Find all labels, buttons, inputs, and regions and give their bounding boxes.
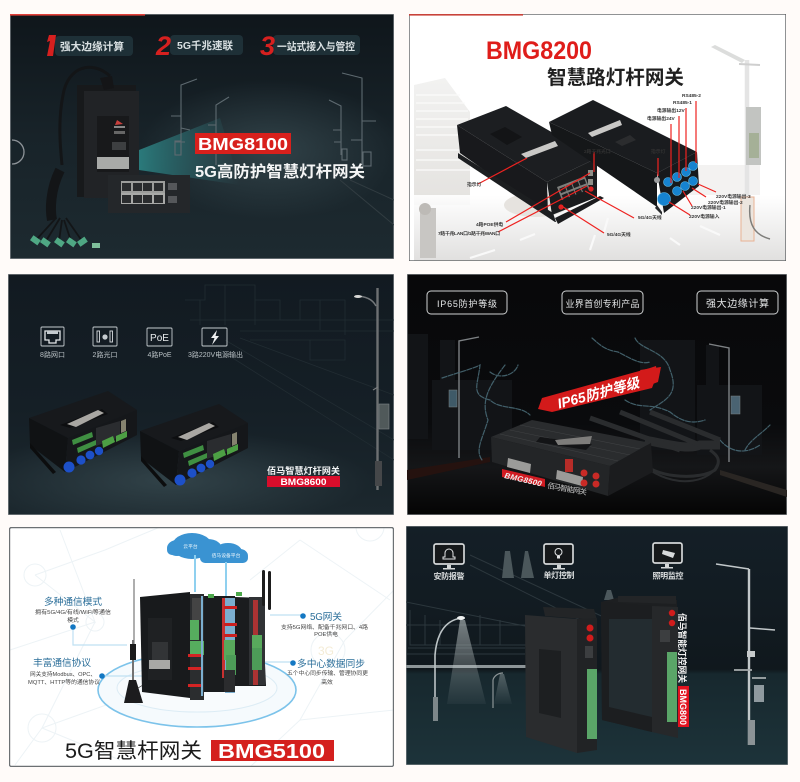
label: BMG8600: [267, 476, 340, 487]
icon: 8路网口: 8路网口: [40, 350, 65, 359]
feature: 多中心数据同步: 高效: [321, 678, 333, 686]
faded city background: [414, 78, 786, 261]
icon: 2路光口: 2路光口: [93, 350, 117, 359]
panel: BMG800 gateway: [406, 526, 788, 765]
faded skyline: [185, 285, 394, 460]
vertical label: 佰马智能灯控网关: [677, 613, 688, 683]
cloud platforms: 佰马设备平台: [212, 552, 241, 559]
label: BMG8500: BMG8500: [504, 471, 543, 489]
icon: 4路PoE: 4路PoE: [147, 350, 172, 359]
panel: BMG8200 gateway: [409, 14, 786, 261]
feature pill: IP65防护等级: IP65防护等级: [437, 298, 497, 309]
feature pill: IP65防护等级: [427, 291, 507, 314]
device 2: [140, 404, 248, 487]
icon: 3路220V电源输出: [188, 328, 243, 359]
label: product name: 佰马智慧灯杆网关: [267, 465, 340, 476]
feature: 多种通信模式: 拥有5G/4G/有线/WiFi等通信: [35, 608, 111, 616]
cloud platforms: [167, 533, 248, 563]
feature: 强大边缘计算: [47, 35, 133, 56]
feature pill: 强大边缘计算: [697, 291, 778, 314]
magnetic antenna: [124, 579, 175, 703]
feature: 5G网关: 支持5G网络、配备千兆网口、4路: [281, 623, 368, 631]
network mesh background: [10, 513, 394, 767]
feature: 丰富通信协议: 网关支持Modbus、OPC、: [30, 670, 96, 678]
panel: BMG8600 gateway: [0, 274, 394, 530]
device: [491, 420, 653, 496]
icon: 4路PoE: PoE: [150, 333, 169, 344]
feature: 强大边缘计算: 强大边缘计算: [60, 40, 124, 53]
feature: 一站式接入与管控: [260, 35, 360, 56]
feature: 丰富通信协议: MQTT、HTTP等的通信协议: [28, 678, 100, 686]
icon: 2路光口: [93, 327, 117, 359]
title: BMG8200: BMG8200: [486, 37, 592, 65]
vertical label: [677, 613, 689, 727]
icon: 4路PoE: [147, 328, 172, 359]
callout labels: 220V电源输入: [689, 213, 720, 220]
smart pole: [711, 45, 770, 241]
cloud links: [195, 555, 226, 596]
cables: [590, 412, 720, 481]
callout labels: 220V电源输出-2: [708, 199, 743, 206]
feature: 5G网关: [281, 610, 368, 638]
icon: 3路220V电源输出: 3路220V电源输出: [188, 350, 243, 359]
feature: 一站式接入与管控: 一站式接入与管控: [277, 40, 355, 53]
callout labels: RS485-1: [673, 100, 692, 106]
ethernet switch: [108, 175, 190, 213]
feature: 多种通信模式: 多种通信模式: [44, 595, 102, 608]
device stack: [140, 570, 271, 700]
callout labels: 指示灯: [651, 148, 666, 155]
feature: 多种通信模式: [35, 595, 111, 630]
device 1: [29, 391, 137, 474]
subtitle: 5G高防护智慧灯杆网关: [195, 162, 365, 181]
street pole: [354, 288, 389, 490]
label: BMG8500: 佰马智能网关: [547, 480, 588, 497]
callout labels: 电源输出24V: [647, 115, 676, 122]
callout labels: [438, 93, 751, 238]
device, left: [457, 106, 604, 224]
panel: BMG8500 gateway: [407, 274, 787, 515]
callout labels: 5G/4G天线: [638, 214, 662, 221]
base ring: [98, 653, 296, 727]
device, right: [549, 100, 699, 215]
callout labels: 7路千兆LAN口/1路千兆WAN口: [438, 230, 500, 237]
feature pill: 强大边缘计算: 强大边缘计算: [706, 297, 769, 310]
street lamp: [433, 616, 512, 721]
banner: IP65防护等级: [538, 366, 661, 412]
callout labels: 220V电源输出-1: [691, 204, 726, 211]
feature: 5G千兆速联: 2: [155, 31, 171, 61]
feature icon: 安防报警: [434, 544, 464, 581]
faded city and overpass: [406, 555, 610, 654]
feature icon: 单灯控制: [544, 544, 574, 580]
feature icon: 单灯控制: 单灯控制: [544, 570, 574, 580]
panel: BMG8100 gateway: [10, 14, 400, 259]
feature: 丰富通信协议: 丰富通信协议: [33, 656, 91, 669]
feature icon: 照明监控: 照明监控: [652, 570, 684, 580]
device, front: [525, 607, 597, 753]
feature: 5G网关: POE供电: [314, 630, 338, 638]
feature: 多种通信模式: 模式: [67, 616, 79, 624]
callout labels: 指示灯: [467, 181, 482, 188]
feature: 5G网关: 5G网关: [310, 610, 342, 623]
feature icon: 安防报警: 安防报警: [434, 571, 464, 581]
device, back: [601, 596, 678, 738]
title: 5G智慧杆网关: 5G智慧杆网关: [65, 740, 202, 763]
connector lines: [73, 615, 303, 676]
cloud platforms: 云平台: [183, 543, 198, 550]
feature pill: 业界首创专利产品: [562, 291, 643, 314]
smart pole: [716, 564, 775, 745]
feature: 多中心数据同步: 多中心数据同步: [297, 657, 365, 670]
feature: 5G千兆速联: 5G千兆速联: [177, 39, 233, 52]
panel: BMG5100 gateway: [9, 513, 394, 767]
callout labels: 220V电源输出-3: [716, 193, 751, 200]
banner: IP65防护等级: IP65防护等级: [556, 374, 643, 412]
callout labels: 电源输出12V: [657, 107, 686, 114]
callout lines: [478, 101, 716, 233]
street poles: [171, 73, 376, 166]
feature: 5G千兆速联: [156, 35, 243, 55]
feature: 多中心数据同步: [287, 657, 368, 686]
device body: [77, 76, 139, 198]
title: BMG8100: BMG8100: [198, 134, 288, 154]
cable bundle: [36, 67, 110, 241]
callout labels: 2路千兆光口: [584, 148, 611, 155]
feature icon: 照明监控: [652, 543, 684, 580]
vertical label: BMG800: [678, 689, 688, 725]
icon: 8路网口: [40, 327, 65, 359]
callout labels: RS485-2: [682, 93, 701, 99]
label: BMG8600: BMG8600: [280, 477, 326, 487]
callout labels: 5G/4G天线: [607, 231, 631, 238]
street poles: [449, 337, 740, 462]
subtitle: 智慧路灯杆网关: [547, 67, 684, 89]
terminal connectors: [30, 235, 100, 248]
label: BMG8500: [502, 469, 588, 497]
faded buildings: [408, 334, 762, 431]
water splash: [442, 338, 770, 460]
label: BMG5100: BMG5100: [218, 741, 325, 763]
feature pill: 业界首创专利产品: 业界首创专利产品: [566, 298, 640, 309]
callout labels: 4路POE供电: [476, 221, 503, 228]
panel: BMG5100 gateway: 3G: [318, 644, 334, 658]
feature: 多中心数据同步: 五个中心同步传输、管理协同更: [287, 669, 368, 677]
feature: 一站式接入与管控: 3: [260, 31, 275, 61]
feature: 丰富通信协议: [28, 656, 105, 686]
